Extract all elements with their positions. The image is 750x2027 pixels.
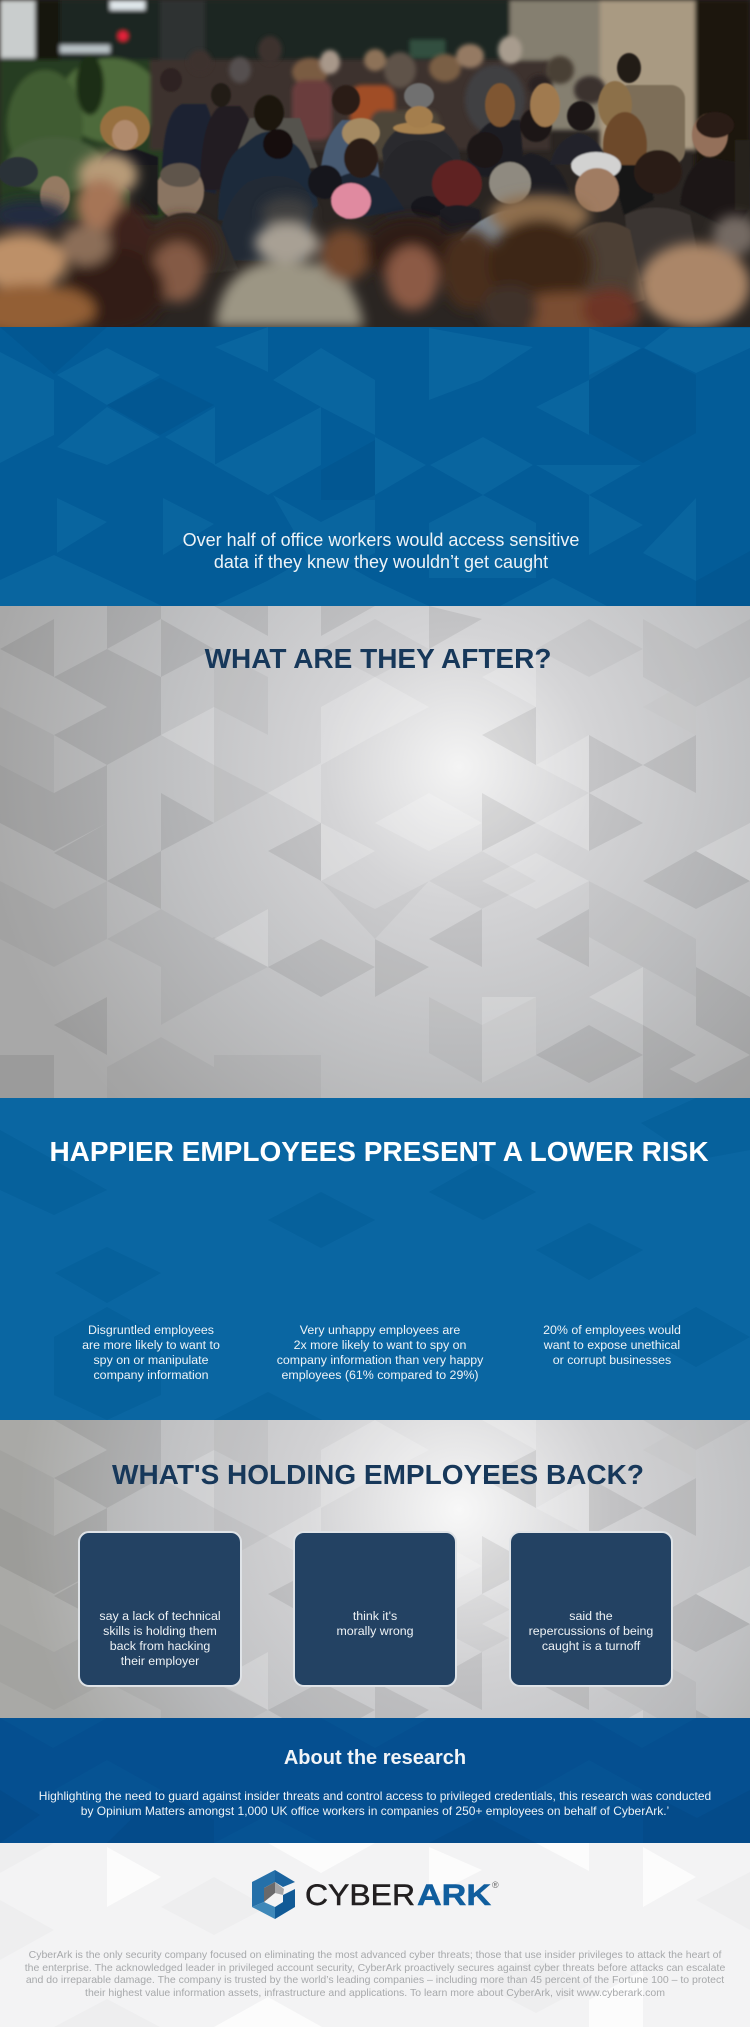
stat: very unhappy employees <box>277 1323 484 1382</box>
heading: About the research <box>284 1747 466 1769</box>
company description: the enterprise. The acknowledged leader in privileged account security, CyberArk proactively secures against cyber threats before attacks can escalate <box>25 1962 725 1974</box>
card: morally wrong: think it's <box>353 1609 397 1623</box>
card: lack of technical skills: skills is holding them <box>103 1624 217 1638</box>
research description: Highlighting the need to guard against insider threats and control access to privileged credentials, this research was conducted <box>39 1789 711 1803</box>
panel: what are they after <box>0 606 750 1098</box>
card: repercussions of being caught <box>509 1531 673 1687</box>
panel: happier employees <box>0 1098 750 1420</box>
research description: by Opinium Matters amongst 1,000 UK office workers in companies of 250+ employees on behalf of CyberArk.’ <box>81 1804 669 1818</box>
card: lack of technical skills: say a lack of technical <box>99 1609 221 1623</box>
panel: CyberArk footer <box>0 1843 750 2027</box>
stat: expose unethical businesses: want to expose unethical <box>544 1338 680 1352</box>
card: repercussions of being caught: repercussions of being <box>529 1624 653 1638</box>
card: morally wrong: morally wrong <box>336 1624 414 1638</box>
stat: disgruntled employees <box>82 1323 220 1382</box>
company description <box>24 1949 725 1999</box>
CyberArk logo <box>252 1870 499 1919</box>
heading: WHAT'S HOLDING EMPLOYEES BACK? <box>112 1459 644 1490</box>
hero photo: crowd of office workers <box>0 0 750 327</box>
stat: disgruntled employees: company information <box>93 1368 208 1382</box>
company description: their highest value information assets, infrastructure and applications. To learn more about CyberArk, visit www.cyberark.com <box>85 1987 665 1999</box>
card: repercussions of being caught: said the <box>569 1609 613 1623</box>
research description <box>39 1789 711 1818</box>
stat: very unhappy employees: company information than very happy <box>277 1353 483 1367</box>
heading: HAPPIER EMPLOYEES PRESENT A LOWER RISK <box>49 1136 709 1167</box>
statement text: data if they knew they wouldn’t get caught <box>214 552 548 572</box>
company description: CyberArk is the only security company focused on eliminating the most advanced cyber threats; those that use insider privileges to attack the heart of <box>29 1949 721 1961</box>
panel: what's holding employees back <box>0 1420 750 1718</box>
stat: expose unethical businesses: or corrupt businesses <box>553 1353 671 1367</box>
company description: and do irreparable damage. The company is trusted by the world’s leading companies – including more than 45 percent of the Fortune 100 – to protect <box>26 1974 724 1986</box>
panel: blue statement band <box>0 327 750 606</box>
stat: very unhappy employees: 2x more likely to want to spy on <box>294 1338 466 1352</box>
card: lack of technical skills <box>78 1531 242 1687</box>
card: morally wrong <box>293 1531 457 1687</box>
panel: about the research <box>0 1718 750 1843</box>
stat: disgruntled employees: spy on or manipulate <box>93 1353 209 1367</box>
heading: WHAT ARE THEY AFTER? <box>205 643 551 674</box>
stat: expose unethical businesses <box>543 1323 681 1367</box>
card: repercussions of being caught: caught is a turnoff <box>542 1639 640 1653</box>
icon: hexagon mark <box>252 1870 295 1919</box>
CyberArk logo: ARK <box>417 1879 491 1912</box>
stat: disgruntled employees: Disgruntled employees <box>88 1323 214 1337</box>
CyberArk logo: ® <box>492 1880 499 1890</box>
statement text: Over half of office workers would access sensitive <box>183 530 579 550</box>
stat: very unhappy employees: Very unhappy employees are <box>300 1323 460 1337</box>
statement text <box>183 530 579 572</box>
stat: expose unethical businesses: 20% of employees would <box>543 1323 681 1337</box>
card: lack of technical skills: their employer <box>121 1654 199 1668</box>
stat: disgruntled employees: are more likely to want to <box>82 1338 220 1352</box>
CyberArk logo: CYBER <box>305 1879 415 1912</box>
card: lack of technical skills: back from hacking <box>110 1639 210 1653</box>
stat: very unhappy employees: employees (61% compared to 29%) <box>282 1368 478 1382</box>
